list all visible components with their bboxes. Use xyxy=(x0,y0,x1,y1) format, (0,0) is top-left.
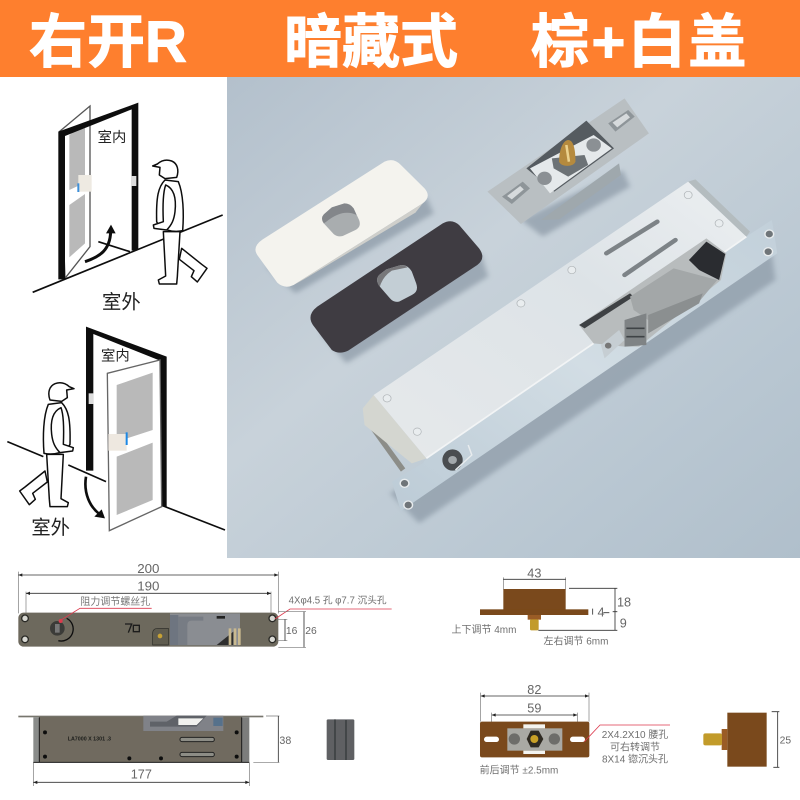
arrow: door opens inward xyxy=(85,225,116,262)
dimension lines: 82 and 59 xyxy=(481,683,589,723)
header banner xyxy=(0,0,800,77)
red callout: resistance adjustment hole: 阻力调节螺丝孔 xyxy=(80,595,150,608)
icon: person walking xyxy=(153,160,207,284)
panel: door diagram pull outward xyxy=(7,327,225,539)
label: vertical adjustment: 上下调节 4mm xyxy=(452,624,516,636)
label: outdoor: 室外 xyxy=(31,517,70,539)
door leaf opened outward xyxy=(107,360,162,531)
dimension line: 25: 25 xyxy=(780,735,791,746)
body front plate xyxy=(18,613,278,647)
header: installation type: 暗藏式 xyxy=(284,10,458,75)
door frame xyxy=(86,327,167,507)
red callout: slotted holes xyxy=(584,725,670,766)
label: front-back adjustment: 前后调节 ±2.5mm xyxy=(480,764,558,777)
label: indoor: 室内 xyxy=(101,348,130,365)
white cover plate xyxy=(255,160,428,287)
red callout: mounting holes xyxy=(275,594,392,619)
red callout: slotted holes: 2X4.2X10 腰孔 xyxy=(602,729,668,741)
striker profile xyxy=(480,589,588,630)
dimension lines: 16 and 26: 16 xyxy=(286,626,298,637)
dimension lines: 38 and 177: 177 xyxy=(131,767,152,781)
panel: striker front drawing xyxy=(480,683,791,777)
long closer body xyxy=(363,179,777,511)
striker front plate xyxy=(480,722,589,757)
dimension lines: 43 18 9 4: 18 xyxy=(617,596,631,610)
red callout: mounting holes: 4Xφ4.5 孔 φ7.7 沉头孔 xyxy=(289,594,387,606)
side view body: LA7000 X 1301 .3 xyxy=(68,736,111,742)
floor lines xyxy=(33,215,223,292)
striker plate xyxy=(487,98,649,224)
panel: main body front drawing xyxy=(18,561,392,647)
door frame xyxy=(58,103,138,279)
dimension lines: 82 and 59: 59 xyxy=(527,702,541,716)
dimension lines: 43 18 9 4: 9 xyxy=(620,617,627,631)
header: opening direction: 右开R xyxy=(29,10,187,75)
dimension lines: 200 and 190: 190 xyxy=(137,579,159,594)
panel: main body side drawing xyxy=(18,716,354,786)
floor lines xyxy=(7,442,225,530)
panel: product photo xyxy=(227,77,800,558)
red callout: slotted holes: 8X14 锪沉头孔 xyxy=(602,753,668,766)
dimension lines: 200 and 190 xyxy=(18,561,278,613)
red callout: slotted holes: 可右转调节 xyxy=(610,740,660,753)
end view block xyxy=(327,719,354,760)
dimension lines: 38 and 177 xyxy=(33,716,291,786)
panel: door diagram push inward xyxy=(33,103,223,314)
dark cover plate xyxy=(310,221,482,353)
dimension lines: 16 and 26 xyxy=(277,612,317,647)
arrow: door opens outward xyxy=(85,477,105,518)
striker side view xyxy=(703,713,767,767)
header: colour: 棕+白盖 xyxy=(531,10,749,75)
product shadows xyxy=(266,170,775,523)
dimension line: 25 xyxy=(772,712,791,767)
red callout: resistance adjustment hole xyxy=(59,595,152,623)
icon: door closer on leaf xyxy=(77,175,136,192)
label: outdoor: 室外 xyxy=(102,292,141,314)
dimension lines: 43 18 9 4: 43 xyxy=(527,567,541,581)
side view body xyxy=(18,716,263,762)
dimension lines: 16 and 26: 26 xyxy=(305,626,317,637)
icon: door closer on leaf xyxy=(89,393,128,451)
label: horizontal adjustment: 左右调节 6mm xyxy=(544,634,608,647)
dimension lines: 43 18 9 4: 4 xyxy=(597,606,605,620)
dimension lines: 200 and 190: 200 xyxy=(137,561,159,576)
panel: striker side drawing xyxy=(452,567,631,647)
door leaf opened inward xyxy=(59,106,90,278)
icon: person walking xyxy=(20,383,74,507)
dimension lines: 82 and 59: 82 xyxy=(527,683,541,697)
dimension lines: 43 18 9 4 xyxy=(503,567,631,631)
dimension lines: 38 and 177: 38 xyxy=(279,735,291,747)
label: indoor: 室内 xyxy=(98,129,126,146)
